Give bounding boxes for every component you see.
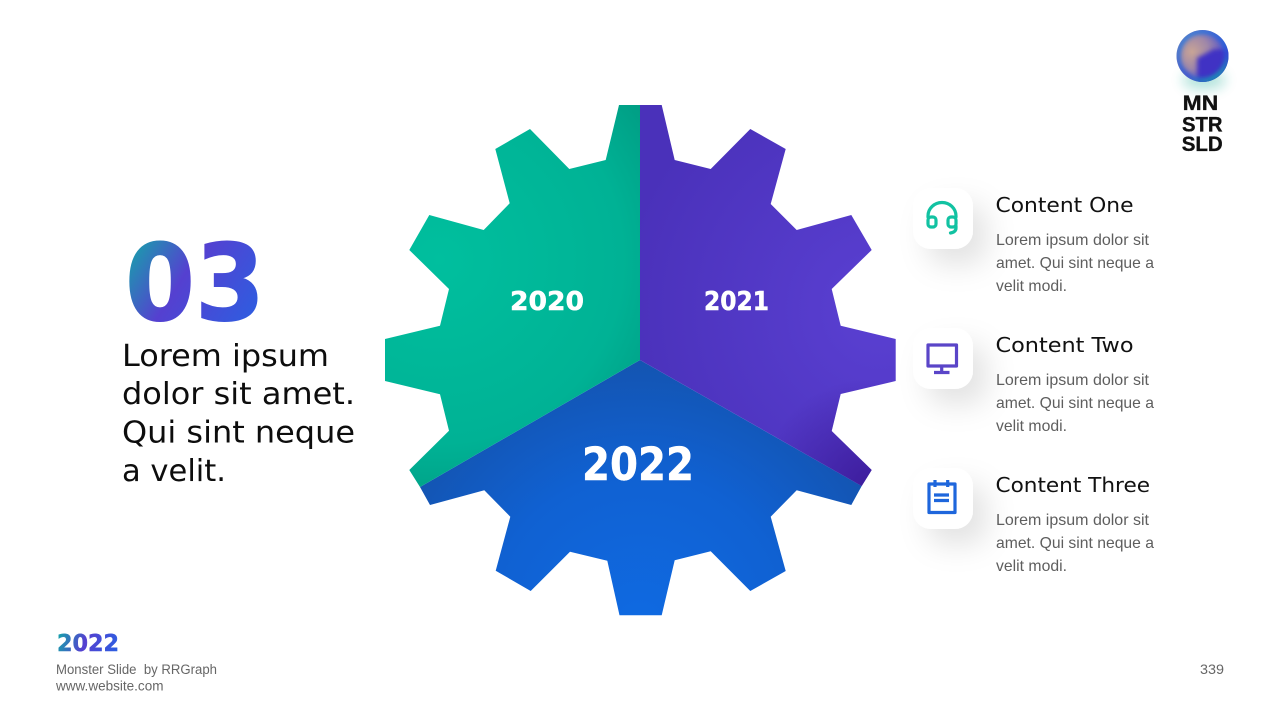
logo: [1176, 30, 1234, 156]
content item two: [913, 328, 1154, 435]
label 2022: 2022: [582, 438, 694, 491]
logo wordmark: [1182, 92, 1223, 156]
description two: amet. Qui sint neque a: [996, 395, 1154, 412]
page number: 339: [1200, 662, 1224, 677]
logo wordmark: MN: [1183, 92, 1218, 115]
description one: amet. Qui sint neque a: [996, 255, 1154, 272]
logo wordmark: SLD: [1182, 133, 1223, 156]
gear segment: 2021 purple: [640, 105, 896, 486]
description two: [996, 372, 1154, 435]
title: Content Two: Content Two: [996, 333, 1134, 357]
heading text block: [122, 339, 355, 489]
description one: velit modi.: [996, 278, 1067, 295]
footer credits: Monster Slide by RRGraph: [56, 662, 217, 677]
gear tip shading: [640, 105, 896, 486]
footer credits: www.website.com: [55, 678, 164, 694]
icon card with headset: [913, 188, 973, 249]
label 2020: 2020: [510, 287, 584, 317]
heading text block: Qui sint neque: [122, 416, 355, 450]
label 2021: 2021: [704, 287, 769, 317]
title: Content Three: Content Three: [996, 473, 1150, 497]
description one: [996, 232, 1154, 295]
footer year: 2022: [57, 631, 119, 657]
icon card with notepad: [913, 468, 973, 529]
content item one: [913, 188, 1154, 295]
gear segment: 2022 blue: [420, 360, 862, 615]
description three: Lorem ipsum dolor sit: [996, 512, 1150, 529]
heading text block: a velit.: [122, 454, 226, 489]
description three: velit modi.: [996, 558, 1067, 575]
logo wordmark: STR: [1182, 114, 1222, 136]
description one: Lorem ipsum dolor sit: [996, 232, 1150, 249]
content item three: [913, 468, 1154, 575]
footer credits: [55, 662, 217, 694]
description three: amet. Qui sint neque a: [996, 535, 1154, 552]
icon card with monitor: [913, 328, 973, 389]
description two: Lorem ipsum dolor sit: [996, 372, 1150, 389]
title: Content One: Content One: [996, 193, 1134, 217]
gear segment: 2020 green: [385, 105, 640, 487]
description three: [996, 512, 1154, 575]
description two: velit modi.: [996, 418, 1067, 435]
heading text block: Lorem ipsum: [122, 339, 329, 374]
big section number: 03: [125, 222, 265, 345]
heading text block: dolor sit amet.: [122, 377, 355, 412]
gear chart: [385, 105, 896, 615]
logo sphere: [1176, 30, 1234, 90]
